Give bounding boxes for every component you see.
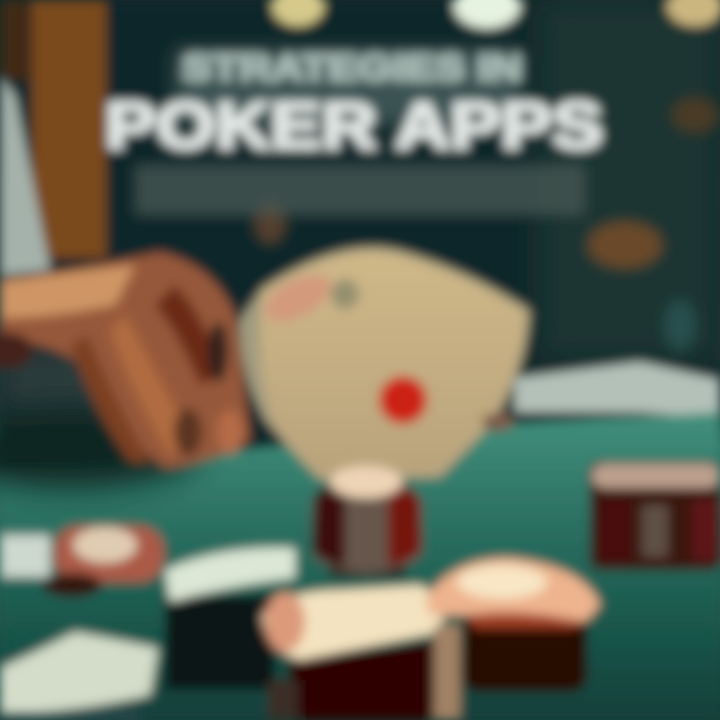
chip stack: front centre [262, 585, 460, 720]
chip stack: left [0, 526, 164, 597]
title: subtitle line [135, 165, 585, 215]
cards: white stack on right [515, 362, 720, 418]
card: held playing cards [240, 247, 530, 480]
chip stack: front right [425, 558, 600, 692]
title: panel haze [175, 50, 520, 125]
left figure: wooden post [0, 0, 106, 258]
title: top line: STRATEGIES IN [182, 47, 522, 88]
card: corner grey mark [331, 279, 359, 309]
chip stack: bottom left white [0, 632, 158, 714]
card: red pip [379, 376, 427, 424]
left figure: white shirt [0, 78, 50, 275]
background details: amber bokeh [254, 97, 719, 351]
lights: bokeh at top [272, 0, 720, 28]
chip stack: black with white top [165, 548, 295, 690]
table: green felt [0, 412, 720, 720]
table: dark left edge [0, 412, 200, 488]
chip stack: centre [312, 466, 422, 577]
title block [105, 47, 603, 215]
shadow: bottom left [0, 712, 140, 720]
card: lower right shadow [482, 413, 514, 431]
title: main line: POKER APPS [105, 88, 603, 162]
card: corner red mark [258, 265, 338, 331]
hand: fingers holding cards [0, 252, 250, 468]
chip stack: right [590, 462, 720, 570]
